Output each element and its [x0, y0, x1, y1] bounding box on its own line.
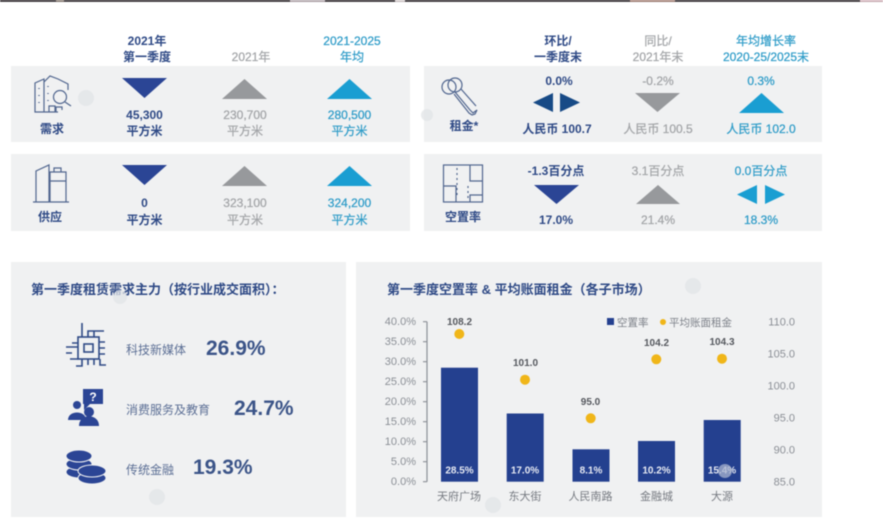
- dot value labels: 108.2: [447, 317, 472, 328]
- value: consumer: 24.7%: [234, 397, 294, 420]
- column headings: left table: 2021年: [128, 33, 166, 48]
- arrow: rent quarter flat: [533, 93, 580, 112]
- column headings: left table: [123, 33, 381, 64]
- column headings: right table: 2021年末: [633, 50, 683, 64]
- icon: people question: [68, 389, 103, 426]
- value: demand average: 平方米: [331, 123, 368, 138]
- column headings: left table: 第一季度: [123, 49, 171, 64]
- arrow: demand average up: [327, 79, 372, 99]
- value: demand 2021: 平方米: [227, 123, 263, 138]
- value: vacancy year: 21.4%: [641, 213, 675, 227]
- left axis: 30.0%: [385, 356, 416, 368]
- column headings: right table: 年均增长率: [736, 33, 796, 48]
- right axis: [767, 316, 795, 488]
- bar value labels: [445, 466, 736, 476]
- label: vacancy: 空置率: [445, 209, 481, 224]
- value: supply average: 平方米: [331, 212, 368, 227]
- value: demand quarter: 45,300: [126, 108, 163, 122]
- panel: rent: [424, 66, 822, 142]
- arrow: rent year down: [635, 93, 680, 112]
- category labels: [437, 489, 733, 503]
- right axis: 85.0: [774, 476, 795, 488]
- icon: floor plan: [444, 165, 482, 202]
- value: vacancy quarter: 17.0%: [539, 213, 573, 227]
- panel: vacancy: [424, 154, 822, 231]
- left axis: 15.0%: [385, 416, 416, 428]
- dot value labels: 104.2: [644, 338, 669, 349]
- value: vacancy average: 18.3%: [744, 213, 778, 227]
- arrow: vacancy average flat: [737, 185, 785, 204]
- panel: demand: [11, 66, 410, 142]
- icon: building with magnifier: [35, 76, 71, 112]
- value: supply average: 324,200: [328, 196, 372, 210]
- legend: [607, 316, 732, 329]
- category labels: 天府广场: [437, 489, 481, 503]
- bar value labels: 17.0%: [511, 466, 539, 476]
- arrow: supply average up: [327, 166, 372, 186]
- value: rent quarter: 人民币 100.7: [522, 122, 592, 136]
- arrow: demand quarter down: [122, 78, 167, 98]
- icon: keys: [442, 78, 477, 115]
- top edge strip: [0, 0, 883, 2]
- bar value labels: 8.1%: [580, 466, 603, 476]
- value: vacancy year change: 3.1百分点: [632, 164, 684, 178]
- value: supply quarter: 0: [141, 196, 148, 210]
- arrow: vacancy year up: [636, 185, 680, 204]
- value: demand average: 280,500: [328, 108, 372, 122]
- dots: average rent: [454, 329, 727, 423]
- bar value labels: 10.2%: [642, 466, 671, 476]
- dot value labels: 104.3: [709, 337, 735, 348]
- arrow: rent growth up: [739, 93, 784, 113]
- value: rent average: 人民币 102.0: [726, 122, 796, 136]
- label: rent: 租金*: [450, 118, 479, 133]
- column headings: left table: 2021年: [232, 50, 270, 64]
- category labels: 东大街: [508, 489, 542, 503]
- watermarks: [78, 90, 732, 513]
- value: rent quarter change: 0.0%: [545, 74, 573, 88]
- value: supply 2021: 323,100: [223, 196, 267, 210]
- icon: people question: ?: [89, 390, 97, 404]
- right axis: 100.0: [767, 380, 795, 392]
- panel: supply: [11, 154, 410, 231]
- label: supply: 供应: [38, 209, 62, 224]
- column headings: left table: 2021-2025: [323, 34, 381, 48]
- arrow: supply quarter down: [122, 165, 167, 185]
- icon: buildings: [33, 165, 69, 202]
- column headings: left table: 年均: [340, 50, 364, 64]
- column headings: right table: 同比/: [644, 34, 672, 48]
- value: rent year change: -0.2%: [642, 74, 674, 88]
- heading: chart: 第一季度空置率 & 平均账面租金（各子市场）: [387, 282, 651, 297]
- legend: 平均账面租金: [669, 316, 732, 329]
- value: rent growth: 0.3%: [747, 74, 775, 88]
- left axis: 25.0%: [385, 376, 416, 388]
- value: tech: 26.9%: [206, 337, 266, 360]
- arrow: vacancy quarter down: [534, 185, 579, 204]
- right axis: 95.0: [774, 412, 795, 424]
- panel: leasing demand: [11, 262, 346, 517]
- value: supply quarter: 平方米: [126, 212, 163, 227]
- bar value labels: 28.5%: [445, 466, 474, 476]
- column headings: right table: 2020-25/2025末: [723, 50, 809, 64]
- category labels: 金融城: [640, 489, 673, 503]
- value: rent year: 人民币 100.5: [623, 122, 693, 136]
- value: vacancy average change: 0.0百分点: [735, 164, 787, 178]
- icon: chip: [66, 323, 106, 366]
- right axis: 90.0: [774, 444, 795, 456]
- column headings: right table: 环比/: [544, 34, 572, 48]
- dot value labels: [447, 317, 735, 408]
- left axis: 5.0%: [391, 456, 416, 468]
- left axis: [385, 316, 427, 488]
- value: demand 2021: 230,700: [223, 108, 267, 122]
- value: finance: 19.3%: [193, 456, 253, 479]
- value: demand quarter: 平方米: [126, 123, 163, 138]
- arrow: demand 2021 up: [222, 79, 267, 99]
- heading: leasing demand: 第一季度租赁需求主力（按行业成交面积）：: [31, 282, 285, 297]
- category labels: 大源: [711, 489, 733, 503]
- label: demand: 需求: [40, 121, 64, 136]
- label: consumer: 消费服务及教育: [126, 402, 210, 417]
- arrow: supply 2021 up: [222, 166, 267, 186]
- bar value labels: 15.4%: [708, 466, 736, 476]
- column headings: right table: 一季度末: [534, 49, 582, 64]
- value: supply 2021: 平方米: [227, 212, 263, 227]
- left axis: 20.0%: [385, 396, 416, 408]
- right axis: 110.0: [768, 316, 795, 328]
- label: finance: 传统金融: [126, 462, 174, 477]
- dot value labels: 101.0: [513, 358, 538, 369]
- right axis: 105.0: [767, 348, 795, 360]
- left axis: 0.0%: [391, 476, 416, 488]
- category labels: 人民南路: [568, 490, 612, 503]
- dot value labels: 95.0: [581, 397, 601, 408]
- bars: vacancy rate: [441, 368, 741, 482]
- panel: vacancy and rent chart: [356, 262, 822, 517]
- left axis: 35.0%: [385, 336, 416, 348]
- left axis: 40.0%: [385, 316, 416, 328]
- column headings: right table: [534, 33, 809, 64]
- legend: 空置率: [617, 316, 648, 329]
- value: vacancy quarter change: -1.3百分点: [528, 163, 584, 178]
- icon: coins: [66, 450, 106, 484]
- left axis: 10.0%: [385, 436, 416, 448]
- label: tech: 科技新媒体: [126, 342, 186, 357]
